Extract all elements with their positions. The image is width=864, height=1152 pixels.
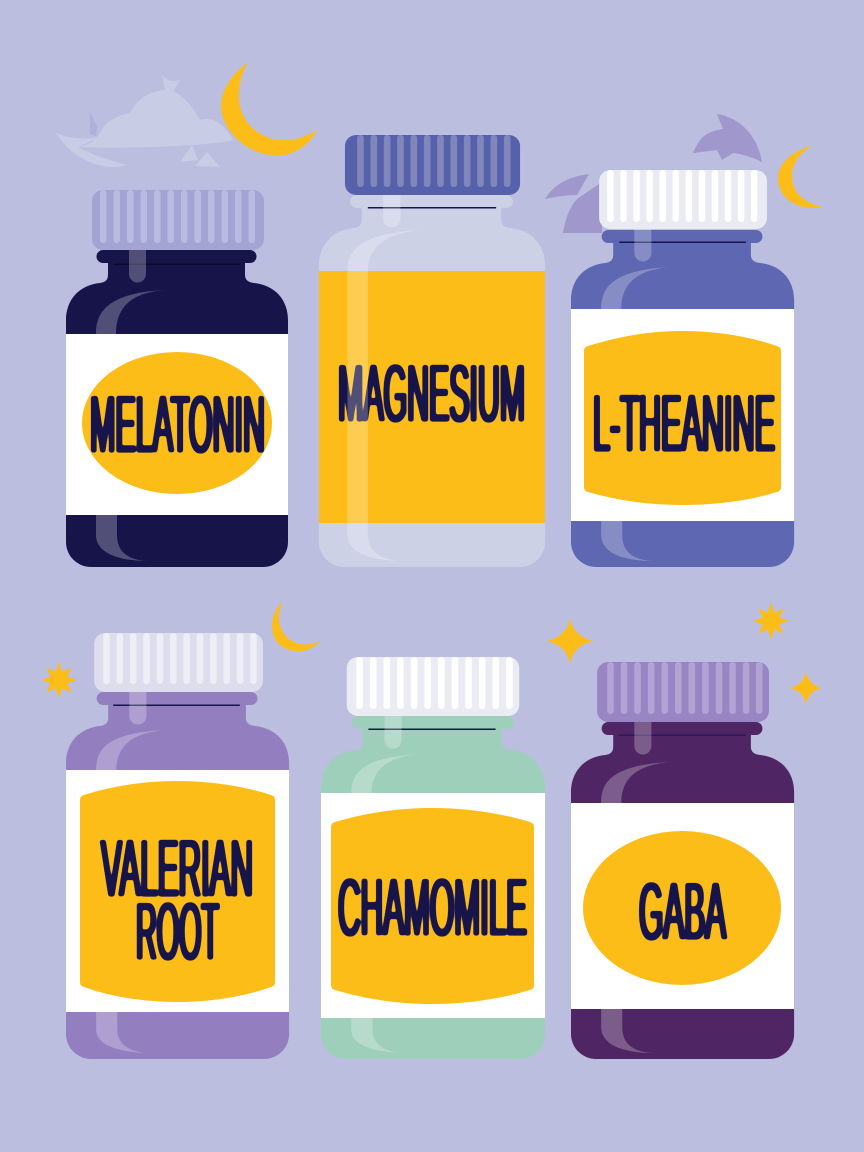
icon: four point sparkle centre: [547, 618, 593, 664]
icon: purple leaf upper right: [693, 114, 762, 162]
bottle: valerian root: ROOT: [136, 887, 219, 977]
label: chamomile yellow panel: [331, 808, 534, 1004]
bottle: gaba: [571, 662, 794, 1059]
label: valerian yellow panel: [80, 781, 275, 1002]
icon: large crescent moon: [221, 62, 317, 156]
bottle: valerian root: [66, 633, 289, 1059]
label: gaba yellow oval: [583, 831, 781, 985]
icon: crescent moon lower: [272, 602, 320, 651]
icon: starburst right: [753, 603, 789, 639]
label: l-theanine yellow panel: [584, 331, 781, 505]
icon: small crescent moon: [778, 146, 823, 208]
bottle: l-theanine: [571, 170, 794, 567]
icon: starburst left: [41, 662, 77, 698]
bottle: chamomile: [321, 657, 545, 1059]
text: VALERIAN: [101, 824, 253, 914]
text: MELATONIN: [90, 380, 265, 470]
label: melatonin yellow oval: [82, 352, 272, 494]
icon: four point sparkle right: [790, 672, 822, 704]
text: CHAMOMILE: [338, 863, 527, 953]
bottle: magnesium: [319, 135, 545, 567]
text: MAGNESIUM: [338, 349, 525, 439]
bottle: melatonin: [66, 190, 288, 567]
icon: purple leaves left of cap: [545, 174, 602, 233]
bottle: gaba: GABA: [639, 867, 726, 957]
cloud decoration: [56, 75, 233, 167]
